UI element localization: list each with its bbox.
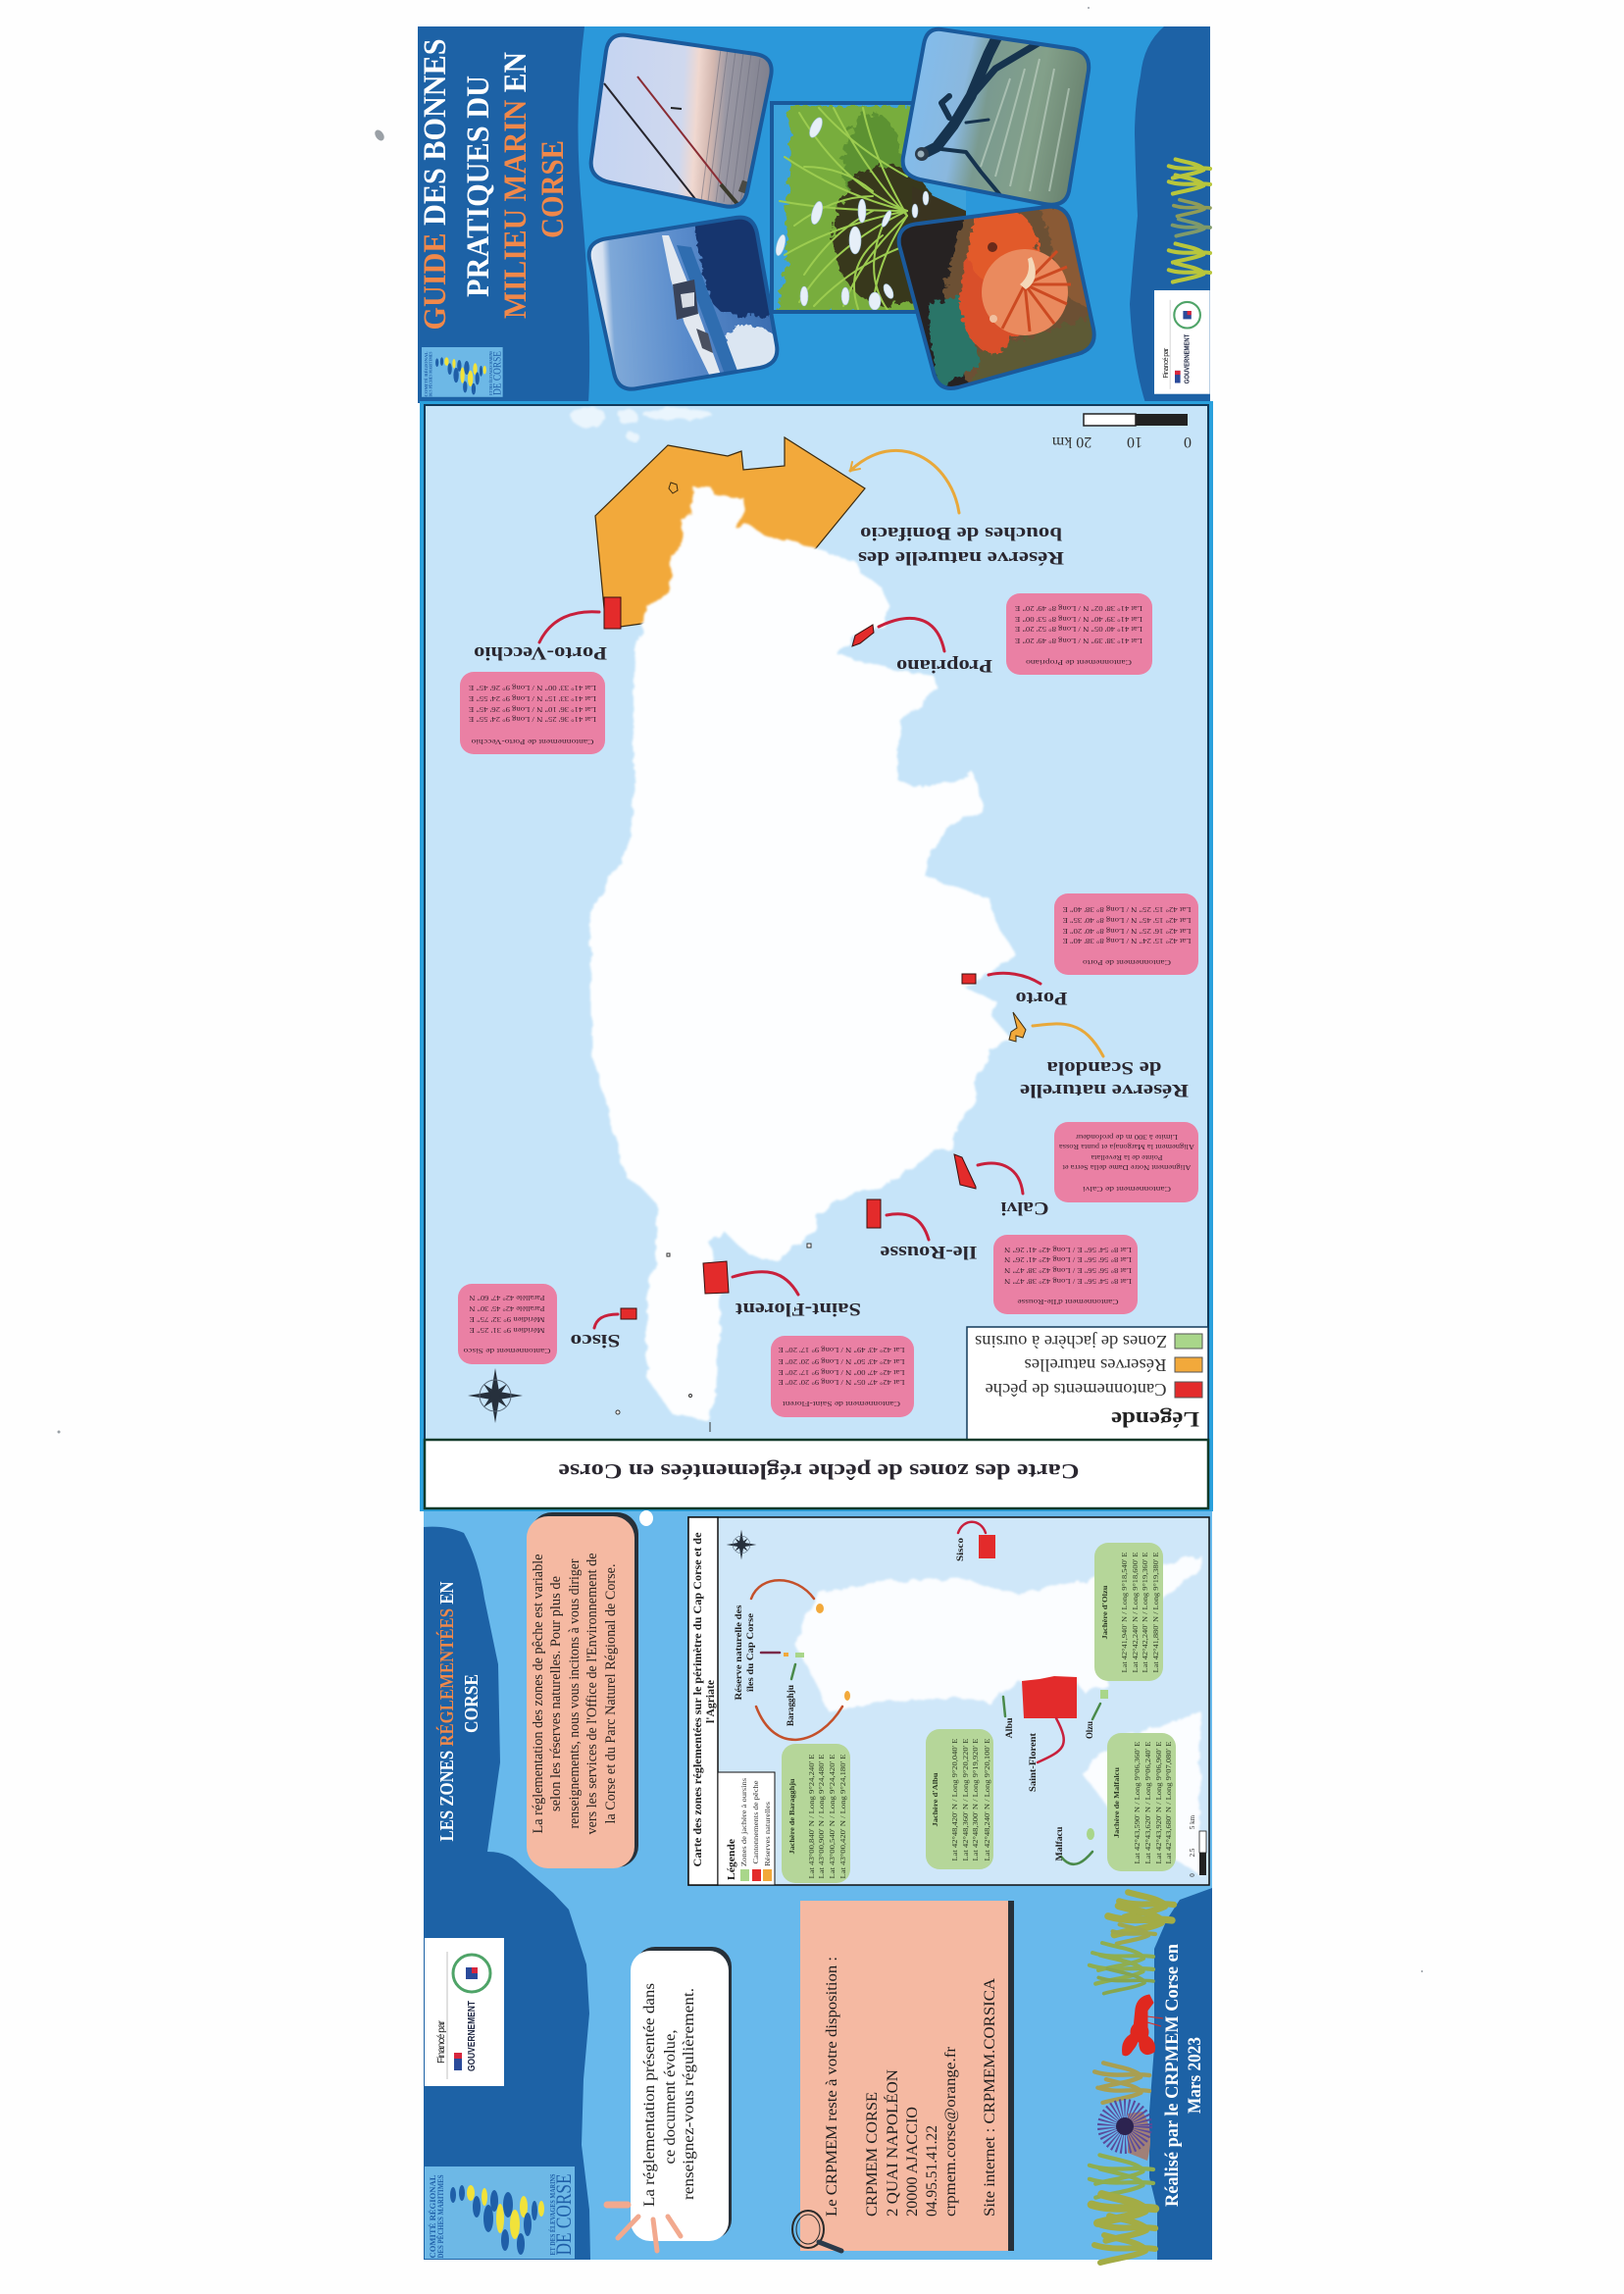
logo: CRPMEM bottom: COMITÉ RÉGIONAL	[428, 2175, 437, 2258]
text block: contact: 04.95.51.41.22	[924, 2125, 940, 2217]
text block: contact: Site internet : CRPMEM.CORSICA	[982, 1978, 998, 2217]
callout: Calvi	[1054, 1122, 1198, 1202]
callout: Ile-Rousse: Lat 8° 56' 56" E / Long 42° 41' 26" N	[1003, 1255, 1132, 1264]
callout: Saint-Florent: Lat 42° 43' 50" N / Long 9° 20' 20" E	[778, 1357, 904, 1366]
photo: fishing rods	[588, 33, 774, 209]
inset legend: Cantonnements de pêche	[752, 1781, 760, 1863]
callout: regulation evolves: ce document évolue,	[662, 2030, 679, 2164]
logo: CRPMEM top: COMITÉ RÉGIONAL	[424, 351, 429, 396]
icon: sea urchin	[1110, 2112, 1150, 2161]
logo: funders bottom	[425, 1938, 504, 2086]
logo: CRPMEM bottom: DES PÊCHES MARITIMES	[435, 2174, 445, 2258]
inset labels: Olzu	[1085, 1721, 1094, 1739]
callout: Sisco: Méridien 9° 32' 75" E	[469, 1315, 545, 1324]
callout: Jachère d'Albu: Lat 42°48,420' N / Long 9°20,040' E	[950, 1738, 959, 1861]
callout: Porto-Vecchio: Cantonnement de Porto-Vecchio	[471, 738, 594, 746]
logo: CRPMEM top: DE CORSE	[489, 351, 503, 395]
callout: regulation evolves	[607, 1947, 732, 2251]
callout: regulation evolves: renseignez-vous régulièrement.	[681, 1988, 697, 2200]
scale bar: 20 km	[1051, 433, 1091, 450]
map place labels: Ile-Rousse	[881, 1242, 977, 1262]
map place labels: Saint-Florent	[735, 1299, 861, 1319]
logo: CRPMEM top: ET DES ÉLEVAGES MARINS	[488, 351, 493, 395]
icon: compass rose	[468, 1368, 523, 1423]
map place labels: Porto-Vecchio	[474, 642, 607, 663]
inset map: Cap Corse and Agriate	[688, 1517, 1209, 1885]
text block: regulation note	[527, 1512, 638, 1868]
map place labels: bouches de Bonifacio	[860, 523, 1062, 543]
logo: CRPMEM bottom: DE CORSE	[551, 2173, 576, 2256]
text block: contact	[800, 1901, 1014, 2251]
title: guide des bonnes pratiques: MILIEU MARIN EN	[498, 52, 533, 319]
callout: Jachère d'Olzu: Lat 42°41,880' N / Long 9°19,380' E	[1151, 1552, 1160, 1673]
callout: Jachère d'Olzu: Jachère d'Olzu	[1100, 1585, 1109, 1640]
logo: CRPMEM top	[422, 347, 503, 397]
callout: Jachère de Baragghju: Jachère de Baragghju	[787, 1779, 796, 1854]
inset labels	[734, 1537, 1094, 1861]
callout: Ile-Rousse	[993, 1235, 1138, 1314]
photo: seagrass with fish	[772, 103, 966, 312]
callout: Propriano: Cantonnement de Propriano	[1026, 658, 1132, 667]
callout: Calvi: Limite à 300 m de profondeur	[1075, 1133, 1178, 1142]
panel: main map of Corsica	[420, 401, 1213, 1511]
legend: Réserves naturelles	[1024, 1355, 1167, 1375]
title: guide des bonnes pratiques: CORSE	[535, 140, 571, 238]
seaweed: bottom	[1090, 1892, 1174, 2263]
text block: contact: crpmem.corse@orange.fr	[942, 2046, 959, 2217]
icon: magnifying glass	[792, 2211, 841, 2251]
callout: Jachère d'Olzu: Lat 42°41,940' N / Long 9°18,540' E	[1120, 1552, 1129, 1673]
callout: Propriano: Lat 41° 40' 05" N / Long 8° 52' 20" E	[1015, 625, 1142, 634]
callout: Jachère de Malfalcu: Lat 42°43,680' N / Long 9°07,080' E	[1164, 1741, 1173, 1863]
inset map: Cap Corse and Agriate: Carte des zones réglementées sur le périmètre du Cap Corse et de	[692, 1532, 704, 1867]
callout: regulation evolves: La réglementation présentée dans	[641, 1983, 658, 2207]
inset arrows	[751, 1522, 1100, 1864]
callout: Sisco	[458, 1284, 557, 1364]
callout: Ile-Rousse: Cantonnement d'Ile-Rousse	[1017, 1298, 1118, 1306]
callout: Jachère d'Olzu	[1094, 1543, 1163, 1681]
map place labels: Sisco	[571, 1330, 620, 1351]
inset legend: Réserves naturelles	[764, 1802, 772, 1866]
text block: contact: 2 QUAI NAPOLÉON	[883, 2069, 901, 2217]
callout: Saint-Florent	[771, 1336, 914, 1417]
inset scale bar	[1189, 1814, 1206, 1877]
callout: Jachère d'Albu: Lat 42°48,360' N / Long 9°20,220' E	[961, 1738, 970, 1861]
heading: regulated zones	[435, 1581, 482, 1842]
photo: scorpionfish	[896, 206, 1096, 390]
map sea	[425, 405, 1208, 1440]
logo: funders top	[1154, 290, 1210, 394]
callout: Calvi: Pointe de la Revellata	[1091, 1153, 1163, 1162]
callout: Calvi: Alignement Notre Dame della Serra et	[1062, 1163, 1191, 1172]
inset labels: Malfacu	[1054, 1826, 1064, 1861]
inset legend: Zones de jachère à oursins	[740, 1778, 748, 1866]
text block: regulation note: la Corse et du Parc Naturel Régional de Corse.	[603, 1563, 619, 1824]
callout: Jachère d'Olzu: Lat 42°42,240' N / Long 9°19,360' E	[1141, 1552, 1149, 1673]
reserve: Bouches de Bonifacio	[595, 437, 865, 629]
callout: Jachère d'Albu	[926, 1729, 993, 1869]
heading: regulated zones: CORSE	[461, 1674, 482, 1733]
callout: Porto: Cantonnement de Porto	[1083, 958, 1171, 967]
callout: Porto: Lat 42° 15' 25" N / Long 8° 38' 40" E	[1062, 905, 1191, 914]
text block: regulation note: renseignements, nous vous incitons à vous diriger	[567, 1558, 583, 1828]
map place labels: de Scandola	[1046, 1057, 1161, 1078]
callout: Saint-Florent: Lat 42° 47' 00" N / Long 9° 17' 20" E	[778, 1368, 904, 1377]
callout: Jachère de Baragghju: Lat 43°00,840' N / Long 9°24,240' E	[807, 1754, 816, 1878]
text block: credit: Mars 2023	[1185, 2037, 1205, 2114]
callout: Saint-Florent: Lat 42° 43' 49" N / Long 9° 17' 20" E	[778, 1346, 904, 1354]
callout: Propriano: Lat 41° 39' 40" N / Long 8° 53' 00" E	[1015, 615, 1142, 624]
icon: inset compass	[727, 1530, 756, 1559]
scale bar: 10	[1127, 433, 1142, 450]
inset labels: Réserve naturelle des	[734, 1605, 743, 1701]
text block: contact: CRPMEM CORSE	[864, 2092, 881, 2217]
island of Corsica	[589, 486, 1017, 1419]
map place labels: Réserve naturelle	[1020, 1080, 1189, 1100]
callout: Propriano: Lat 41° 38' 02" N / Long 8° 49' 20" E	[1015, 604, 1142, 613]
callout: Saint-Florent: Cantonnement de Saint-Florent	[782, 1400, 900, 1408]
title: guide des bonnes pratiques: GUIDE DES BONNES	[418, 39, 453, 330]
logo: CRPMEM bottom	[425, 2167, 576, 2259]
callout: Jachère de Malfalcu: Lat 42°43,590' N / Long 9°06,360' E	[1133, 1741, 1142, 1863]
logo: funders bottom: Financé par	[436, 2019, 447, 2064]
icon: lobster	[1123, 1995, 1163, 2056]
callout: Porto: Lat 42° 16' 25" N / Long 8° 40' 20" E	[1062, 927, 1191, 936]
logo: funders top: GOUVERNEMENT	[1185, 333, 1192, 383]
legend: Cantonnements de pêche	[985, 1380, 1167, 1400]
text block: regulation note: vers les services de l'Office de l'Environnement de	[584, 1554, 600, 1834]
callout: Porto	[1054, 893, 1198, 975]
photo: boat	[584, 211, 785, 397]
photo: diver	[897, 25, 1093, 211]
callout: Porto-Vecchio	[460, 672, 605, 754]
inset labels: Sisco	[955, 1537, 965, 1561]
text block: credit: Réalisé par le CRPMEM Corse en	[1162, 1944, 1183, 2207]
map place labels: Réserve naturelle des	[858, 547, 1064, 568]
callout: Calvi: Alignement la Margonaja et punta Rossa	[1058, 1143, 1194, 1151]
inset map: Cap Corse and Agriate: l'Agriate	[705, 1680, 717, 1723]
heading: regulated zones: LES ZONES RÉGLEMENTÉES EN	[435, 1581, 458, 1842]
callout: Sisco: Méridien 9° 31' 25" E	[469, 1326, 545, 1335]
reserve islet	[669, 483, 678, 493]
callout: Jachère de Baragghju: Lat 43°00,540' N / Long 9°24,420' E	[828, 1754, 837, 1878]
islets	[616, 1244, 811, 1432]
logo: funders bottom: GOUVERNEMENT	[467, 2001, 478, 2071]
scan specks	[57, 7, 1423, 1972]
callout: Sisco: Parallèle 42° 47' 60" N	[469, 1294, 545, 1302]
callout: Ile-Rousse: Lat 8° 54' 56" E / Long 42° 38' 47" N	[1003, 1277, 1132, 1286]
callout: Jachère d'Albu: Jachère d'Albu	[931, 1772, 939, 1827]
legend: Zones de jachère à oursins	[975, 1332, 1167, 1351]
decorative bubble	[639, 1510, 653, 1526]
callout: Jachère de Malfalcu: Lat 42°43,920' N / Long 9°06,960' E	[1154, 1741, 1163, 1863]
inset scale bar: 2.5	[1189, 1848, 1196, 1857]
callout: Porto-Vecchio: Lat 41° 33' 00" N / Long 9° 26' 45" E	[469, 684, 596, 692]
callout: Jachère de Baragghju: Lat 43°00,900' N / Long 9°24,480' E	[817, 1754, 826, 1878]
logo: funders top: Financé par	[1163, 347, 1170, 379]
callout: Jachère de Malfalcu: Lat 42°43,620' N / Long 9°06,240' E	[1143, 1741, 1152, 1863]
callout: Saint-Florent: Lat 42° 47' 05" N / Long 9° 20' 20" E	[778, 1378, 904, 1387]
callout: Jachère de Baragghju	[782, 1744, 850, 1883]
map place labels	[474, 523, 1189, 1351]
callout: Calvi: Cantonnement de Calvi	[1083, 1185, 1171, 1194]
legend	[967, 1327, 1208, 1440]
text block: regulation note: La réglementation des zones de pêche est variable	[531, 1554, 546, 1834]
Scandola reserve	[1009, 1012, 1026, 1042]
callout: Porto-Vecchio: Lat 41° 36' 10" N / Long 9° 26' 45" E	[469, 705, 596, 714]
text block: contact: Le CRPMEM reste à votre disposition :	[824, 1957, 840, 2217]
callout: Jachère d'Olzu: Lat 42°42,240' N / Long 9°18,600' E	[1131, 1552, 1140, 1673]
inset map title	[688, 1517, 718, 1885]
scale bar: 0	[1184, 433, 1192, 450]
map place labels: Propriano	[896, 655, 992, 676]
callout: Propriano: Lat 41° 38' 39" N / Long 8° 49' 20" E	[1015, 637, 1142, 645]
inset labels: Saint-Florent	[1028, 1733, 1038, 1792]
seaweed: cover	[1169, 159, 1210, 282]
callout: Jachère de Malfalcu: Jachère de Malfalcu	[1112, 1767, 1121, 1838]
inset legend	[718, 1772, 775, 1885]
inset zones	[784, 1535, 1108, 1840]
callout: Jachère d'Albu: Lat 42°48,300' N / Long 9°19,920' E	[971, 1738, 980, 1861]
inset legend: Légende	[726, 1839, 737, 1880]
legend: Légende	[1111, 1407, 1199, 1432]
scale bar	[1051, 414, 1192, 450]
callout: Sisco: Parallèle 42° 45' 30" N	[469, 1304, 545, 1313]
callout: Porto: Lat 42° 15' 24" N / Long 8° 38' 40" E	[1062, 937, 1191, 945]
inset labels: Baragghju	[786, 1685, 795, 1726]
cantonnement patches	[604, 597, 976, 1319]
icon: attention rays	[607, 2205, 681, 2251]
inset scale bar: 5 km	[1189, 1814, 1196, 1829]
callout: Jachère de Baragghju: Lat 43°00,420' N / Long 9°24,180' E	[838, 1754, 847, 1878]
callout: Propriano	[1006, 593, 1152, 675]
callout: Ile-Rousse: Lat 8° 54' 56" E / Long 42° 41' 26" N	[1003, 1246, 1132, 1254]
title: guide des bonnes pratiques	[418, 39, 571, 330]
callout: Porto: Lat 42° 15' 45" N / Long 8° 40' 35" E	[1062, 916, 1191, 925]
logo: CRPMEM top: DES PÊCHES MARITIMES	[428, 351, 432, 396]
title: map title	[425, 1440, 1208, 1508]
inset labels: îles du Cap Corse	[745, 1613, 755, 1693]
title: map title: Carte des zones de pêche réglementées en Corse	[558, 1459, 1079, 1484]
inset labels: Albu	[1004, 1718, 1014, 1738]
callout: Ile-Rousse: Lat 8° 56' 56" E / Long 42° 38' 47" N	[1003, 1266, 1132, 1275]
footer wave	[1149, 1888, 1212, 2260]
text block: contact: 20000 AJACCIO	[904, 2107, 921, 2217]
inset scale bar: 0	[1189, 1873, 1196, 1877]
Sardinia islets	[571, 407, 711, 441]
panel: regulated zones	[424, 1510, 1212, 2263]
callout: Jachère de Malfalcu	[1107, 1733, 1176, 1871]
callout: Jachère d'Albu: Lat 42°48,240' N / Long 9°20,100' E	[983, 1738, 991, 1861]
logo: CRPMEM bottom: ET DES ÉLEVAGES MARINS	[549, 2173, 557, 2256]
callout: Porto-Vecchio: Lat 41° 36' 25" N / Long 9° 24' 55" E	[469, 715, 596, 724]
panel: cover	[418, 25, 1210, 403]
text block: credit	[1162, 1944, 1205, 2207]
map place labels: Calvi	[1001, 1198, 1048, 1218]
text block: regulation note: selon les réserves naturelles. Pour plus de	[548, 1576, 564, 1811]
title: guide des bonnes pratiques: PRATIQUES DU	[461, 76, 496, 297]
curved arrows	[539, 450, 1103, 1328]
callout: Sisco: Cantonnement de Sisco	[463, 1347, 551, 1355]
callout: Porto-Vecchio: Lat 41° 33' 15" N / Long 9° 24' 55" E	[469, 694, 596, 703]
map place labels: Porto	[1016, 988, 1067, 1008]
